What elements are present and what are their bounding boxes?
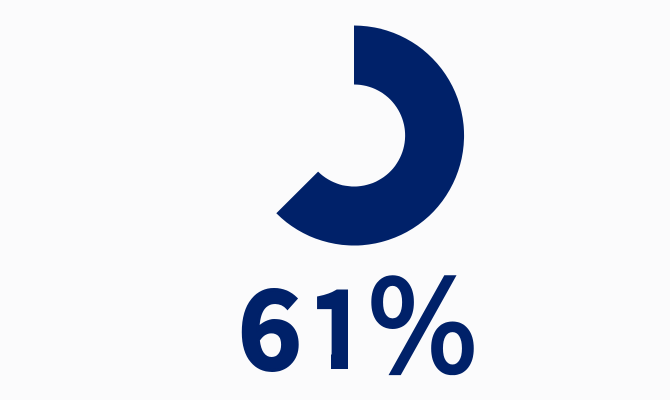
percentage label: 6 [238,245,302,400]
percentage label: % [366,254,479,400]
infographic canvas [242,26,474,376]
donut chart: 61% arc [276,25,464,245]
percentage label [242,275,474,376]
percentage label: 1 [307,245,371,400]
